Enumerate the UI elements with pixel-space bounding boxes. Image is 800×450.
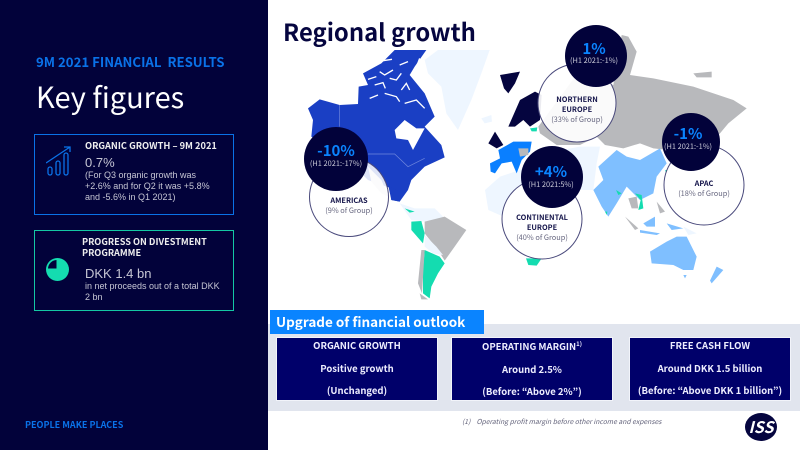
circle: americas	[304, 127, 388, 236]
card: operating margin	[451, 337, 613, 401]
circle: northern europe: NORTHERN	[556, 94, 598, 105]
card: operating margin: OPERATING MARGIN1)	[482, 339, 582, 353]
heading: key figures: Key figures	[36, 75, 184, 117]
map: europe africa asia	[485, 35, 747, 283]
heading: divestment	[82, 234, 207, 259]
card: free cash flow	[629, 337, 791, 401]
circle: northern europe: EUROPE	[562, 104, 593, 115]
card: free cash flow: (Before: “Above DKK 1 billion”)	[638, 383, 782, 397]
circle: continental europe: (H1 2021:5%)	[528, 179, 574, 190]
card: operating margin: (Before: “Above 2%”)	[482, 384, 582, 398]
panel: financial outlook band	[268, 324, 800, 411]
card: free cash flow: FREE CASH FLOW	[670, 338, 750, 352]
circle: apac: (18% of Group)	[678, 188, 730, 199]
footnote: (1) Operating profit margin before other income and expenses	[462, 416, 661, 426]
panel: key figures sidebar	[0, 0, 268, 450]
figure: 0.7%: 0.7%	[85, 155, 115, 170]
title: regional growth: Regional growth	[283, 13, 476, 48]
map: americas	[308, 50, 492, 299]
icon: rising bar chart	[46, 146, 71, 176]
card: organic growth: ORGANIC GROWTH	[313, 338, 401, 352]
icon: progress pie	[46, 258, 69, 281]
circle: northern europe: (H1 2021:-1%)	[570, 55, 618, 66]
text: quarterly detail: (For Q3 organic growth was	[85, 170, 196, 180]
heading: divestment: PROGRAMME	[82, 245, 141, 259]
circle: apac: APAC	[694, 178, 714, 189]
text: net proceeds: in net proceeds out of a total DKK	[85, 281, 220, 291]
card: organic growth	[276, 337, 438, 401]
circle: apac: -1%	[674, 123, 702, 144]
logo: ISS: ISS	[749, 414, 775, 438]
circle: northern europe	[538, 25, 627, 142]
circle: continental europe: CONTINENTAL	[516, 212, 568, 223]
panel: divestment programme	[34, 230, 234, 311]
heading: organic growth: ORGANIC GROWTH – 9M 2021	[85, 138, 217, 152]
circle: continental europe	[502, 146, 583, 259]
card: organic growth: Positive growth	[320, 361, 394, 375]
circle: continental europe: +4%	[535, 161, 567, 182]
card: operating margin: Around 2.5%	[502, 362, 562, 376]
circle: americas: AMERICAS	[329, 195, 368, 206]
circle: americas: -10%	[317, 140, 355, 161]
text: quarterly detail: and -5.6% in Q1 2021)	[85, 192, 176, 202]
text: net proceeds	[85, 281, 220, 302]
text: quarterly detail: +2.6% and for Q2 it was +5.8%	[85, 181, 210, 191]
figure: DKK 1.4 bn: DKK 1.4 bn	[85, 266, 152, 281]
circle: americas: (9% of Group)	[325, 205, 373, 216]
heading: upgrade of financial outlook: Upgrade of financial outlook	[276, 311, 465, 331]
circle: northern europe: (33% of Group)	[551, 114, 603, 125]
circle: americas: (H1 2021:-17%)	[310, 158, 362, 169]
circle: apac	[662, 113, 744, 225]
circle: continental europe: EUROPE	[527, 222, 558, 233]
circle: northern europe: 1%	[582, 38, 606, 59]
card: free cash flow: Around DKK 1.5 billion	[658, 361, 762, 375]
text: net proceeds: 2 bn	[85, 292, 103, 302]
circle: continental europe: (40% of Group)	[516, 232, 568, 243]
card: organic growth: (Unchanged)	[327, 383, 387, 397]
eyebrow heading: 9M 2021 FINANCIAL RESULTS	[36, 52, 225, 71]
heading: divestment: PROGRESS ON DIVESTMENT	[82, 234, 207, 248]
circle: apac: (H1 2021:-1%)	[664, 141, 712, 152]
tagline: PEOPLE MAKE PLACES	[25, 418, 123, 431]
logo: ISS	[745, 413, 777, 441]
text: quarterly detail	[85, 170, 210, 202]
panel: organic growth	[34, 134, 234, 215]
